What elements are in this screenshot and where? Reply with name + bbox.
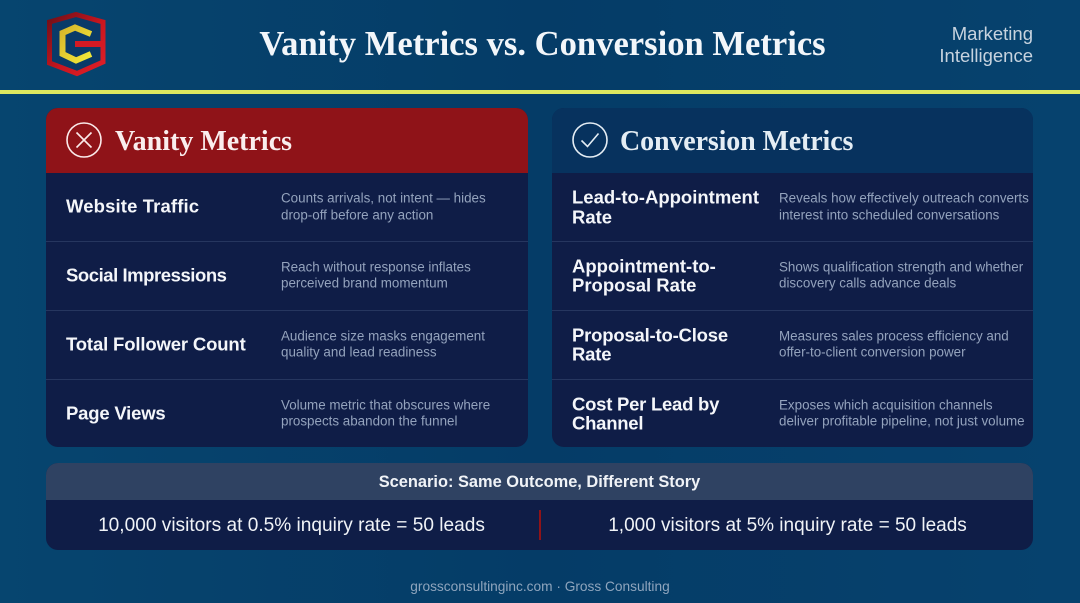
- row: website traffic: drop-off before any action: [281, 207, 433, 222]
- heading: Conversion Metrics: [620, 126, 853, 157]
- panel: conversion metrics: [552, 108, 1033, 447]
- row: lead to appointment: interest into scheduled conversations: [779, 207, 999, 222]
- row: appointment to proposal: Appointment-to-: [572, 255, 716, 276]
- right equation: 1,000 visitors at 5% inquiry rate = 50 leads: [608, 515, 967, 536]
- scenario heading: Scenario: Same Outcome, Different Story: [379, 473, 700, 491]
- row: total follower count: Audience size masks engagement: [281, 328, 485, 343]
- row: social impressions: perceived brand momentum: [281, 276, 448, 290]
- row: cost per lead: [552, 379, 1033, 447]
- row: appointment to proposal: [552, 241, 1033, 309]
- row: appointment to proposal: Shows qualification strength and whether: [779, 259, 1023, 274]
- row: proposal to close: Proposal-to-Close: [572, 324, 728, 345]
- row: page views: Volume metric that obscures where: [281, 397, 490, 412]
- section label: Marketing Intelligence: [939, 23, 1033, 66]
- section label: Marketing Intelligence: Intelligence: [939, 45, 1033, 66]
- row: social impressions: Social Impressions: [66, 264, 227, 285]
- divider line: [0, 90, 1080, 94]
- row: lead to appointment: Rate: [572, 206, 612, 227]
- row: appointment to proposal: discovery calls advance deals: [779, 276, 956, 290]
- panel: scenario: [46, 463, 1033, 550]
- row: lead to appointment: Lead-to-Appointment: [572, 186, 759, 208]
- section label: Marketing Intelligence: Marketing: [952, 23, 1033, 44]
- row: page views: [46, 379, 528, 447]
- scenario heading: [46, 463, 1033, 500]
- row: proposal to close: Rate: [572, 344, 611, 364]
- title: Vanity Metrics vs. Conversion Metrics: [259, 25, 826, 63]
- row: proposal to close: [552, 310, 1033, 378]
- row: cost per lead: Channel: [572, 412, 643, 434]
- red separator: [539, 510, 541, 540]
- row: cost per lead: Cost Per Lead by: [572, 393, 719, 414]
- footer: grossconsultinginc.com · Gross Consulting: [410, 579, 670, 594]
- heading: Vanity Metrics: [115, 126, 292, 157]
- row: lead to appointment: [572, 186, 1029, 227]
- panel: vanity metrics: [46, 108, 528, 447]
- row: page views: Page Views: [66, 402, 165, 423]
- row: appointment to proposal: Proposal Rate: [572, 274, 696, 296]
- icon: check circle: [572, 122, 608, 158]
- row: social impressions: Reach without response inflates: [281, 259, 471, 274]
- row: website traffic: [66, 190, 486, 222]
- row: cost per lead: deliver profitable pipeline, not just volume: [779, 414, 1025, 428]
- row: proposal to close: offer-to-client conversion power: [779, 344, 966, 360]
- row: cost per lead: Exposes which acquisition channels: [779, 397, 993, 412]
- row: total follower count: [46, 310, 528, 378]
- row: lead to appointment: Reveals how effectively outreach converts: [779, 190, 1029, 206]
- row: page views: prospects abandon the funnel: [281, 414, 457, 428]
- row: proposal to close: Measures sales process efficiency and: [779, 328, 1009, 343]
- row: total follower count: quality and lead readiness: [281, 344, 437, 360]
- icon: x circle: [66, 122, 102, 158]
- row: website traffic: Website Traffic: [66, 195, 199, 216]
- row: website traffic: Counts arrivals, not intent — hides: [281, 190, 486, 206]
- row: total follower count: Total Follower Count: [66, 333, 246, 354]
- header: vanity metrics: [46, 108, 528, 173]
- logo: hexagon G: [47, 12, 106, 76]
- header: conversion metrics: [552, 108, 1033, 173]
- row: social impressions: [46, 241, 528, 309]
- left equation: 10,000 visitors at 0.5% inquiry rate = 50 leads: [98, 515, 485, 536]
